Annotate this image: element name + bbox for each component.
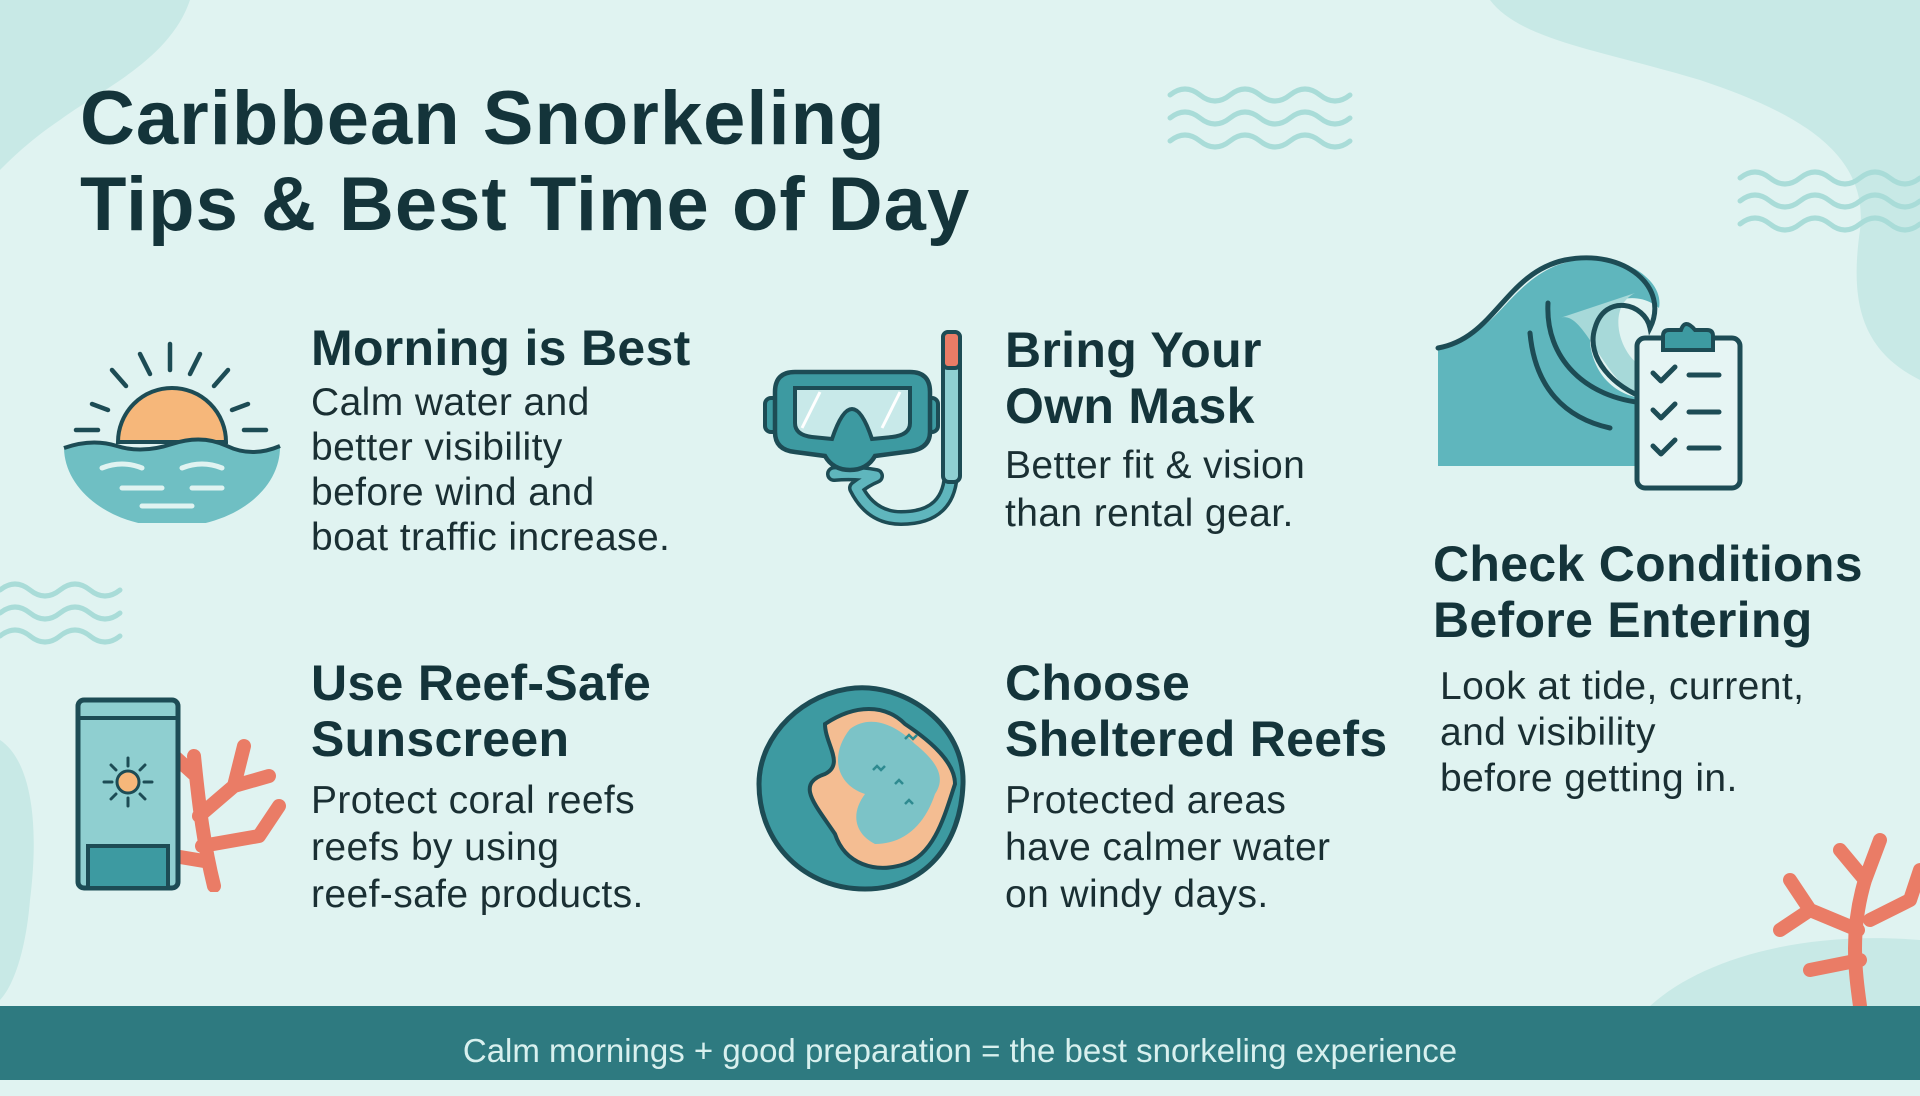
icon: sheltered reef map bbox=[756, 685, 966, 892]
tip: check conditions: Check Conditions bbox=[1433, 536, 1863, 592]
tip: sheltered reefs: Protected areas bbox=[1005, 779, 1286, 822]
tip: sheltered reefs: Choose bbox=[1005, 655, 1190, 711]
tip: morning: before wind and bbox=[311, 471, 595, 514]
tip: morning: boat traffic increase. bbox=[311, 516, 670, 559]
tip: mask: Own Mask bbox=[1005, 378, 1255, 434]
tip: sheltered reefs: have calmer water bbox=[1005, 826, 1330, 869]
tip: morning: better visibility bbox=[311, 426, 563, 469]
icon: mask and snorkel bbox=[763, 330, 962, 526]
tip: morning: Morning is Best bbox=[311, 320, 691, 376]
tip: mask bbox=[1005, 322, 1305, 535]
tip: sheltered reefs: Sheltered Reefs bbox=[1005, 711, 1387, 767]
tip: morning: Calm water and bbox=[311, 381, 590, 424]
tip: check conditions: Before Entering bbox=[1433, 592, 1813, 648]
tip: sunscreen bbox=[311, 655, 651, 916]
tip: check conditions: and visibility bbox=[1440, 711, 1656, 754]
tip: sunscreen: reefs by using bbox=[311, 826, 559, 869]
icon: wave and checklist bbox=[1436, 255, 1742, 490]
icon: sunrise over water bbox=[63, 342, 281, 523]
tip: sunscreen: Use Reef-Safe bbox=[311, 655, 651, 711]
tip: check conditions: before getting in. bbox=[1440, 757, 1738, 800]
title: Tips & Best Time of Day bbox=[80, 162, 970, 247]
footer banner bbox=[0, 1006, 1920, 1080]
decoration: corner coral bbox=[1773, 833, 1920, 1006]
title: Caribbean Snorkeling bbox=[80, 76, 886, 161]
tip: sheltered reefs bbox=[1005, 655, 1387, 916]
tip: mask: Bring Your bbox=[1005, 322, 1262, 378]
tip: sunscreen: Protect coral reefs bbox=[311, 779, 635, 822]
tip: sunscreen: reef-safe products. bbox=[311, 873, 644, 916]
tip: sunscreen: Sunscreen bbox=[311, 711, 569, 767]
tip: mask: Better fit & vision bbox=[1005, 444, 1305, 487]
footer banner: Calm mornings + good preparation = the best snorkeling experience bbox=[463, 1032, 1457, 1069]
tip: check conditions bbox=[1433, 536, 1863, 800]
tip: sheltered reefs: on windy days. bbox=[1005, 873, 1269, 916]
icon: sunscreen and coral bbox=[76, 698, 286, 892]
tip: morning bbox=[311, 320, 691, 559]
title bbox=[80, 76, 970, 247]
tip: check conditions: Look at tide, current, bbox=[1440, 665, 1804, 708]
tip: mask: than rental gear. bbox=[1005, 492, 1294, 535]
